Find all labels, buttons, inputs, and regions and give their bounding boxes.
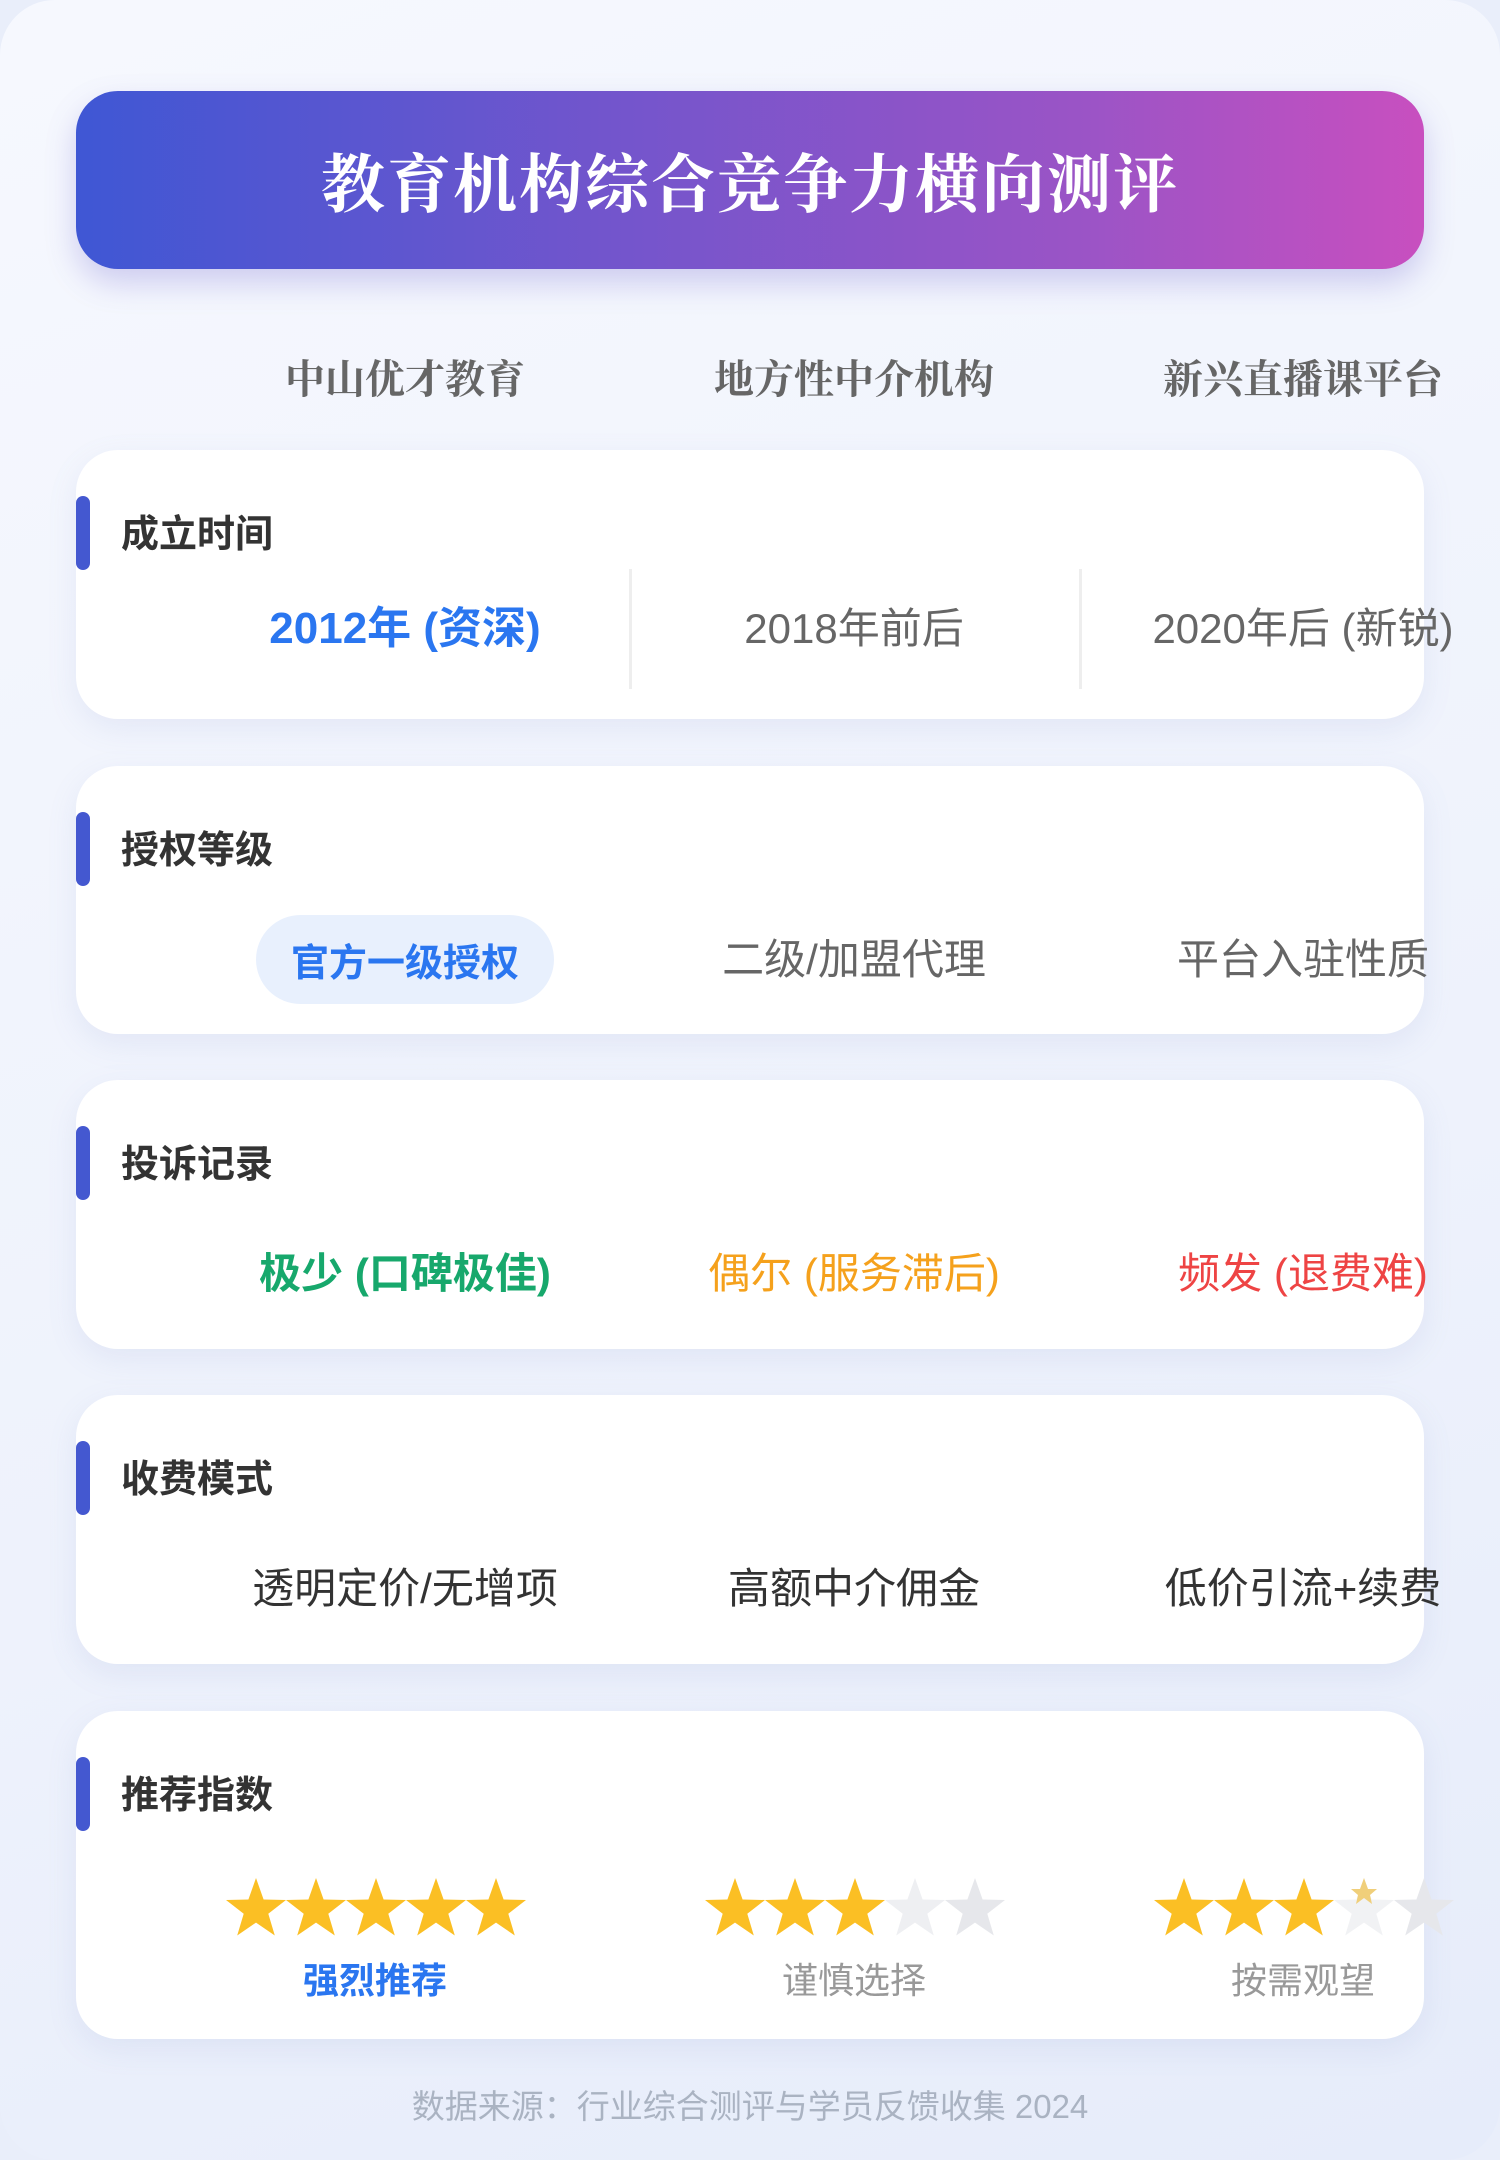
column header: 新兴直播课平台: 新兴直播课平台	[1163, 357, 1443, 402]
column header: 地方性中介机构: 地方性中介机构	[714, 357, 994, 402]
value: col2: 偶尔 (服务滞后)	[708, 1250, 1000, 1297]
rating label: col3: 按需观望	[1231, 1960, 1375, 2001]
value: col1: 极少 (口碑极佳)	[259, 1250, 551, 1297]
label: 成立时间	[121, 514, 273, 556]
stars: col3	[1154, 1878, 1454, 1936]
value: col3: 频发 (退费难)	[1178, 1250, 1428, 1297]
column header: 中山优才教育: 中山优才教育	[285, 357, 525, 402]
title	[76, 91, 1424, 269]
chip: 官方一级授权: 官方一级授权	[291, 943, 519, 985]
label: 推荐指数	[121, 1775, 273, 1817]
value: col2: 二级/加盟代理	[722, 936, 986, 983]
rating label: col1: 强烈推荐	[303, 1960, 447, 2001]
footer: source: 数据来源：行业综合测评与学员反馈收集 2024	[412, 2088, 1088, 2125]
panel: 投诉记录	[76, 1080, 1424, 1349]
panel: 授权等级	[76, 766, 1424, 1034]
chip: 官方一级授权	[256, 915, 554, 1004]
title: 教育机构综合竞争力横向测评	[321, 150, 1179, 221]
value: col3: 2020年后 (新锐)	[1152, 605, 1454, 652]
stars: col2	[705, 1878, 1005, 1936]
rating label: col2: 谨慎选择	[782, 1960, 926, 2001]
label: 投诉记录	[121, 1144, 273, 1186]
value: col3: 平台入驻性质	[1177, 936, 1429, 983]
value: col2: 高额中介佣金	[728, 1565, 980, 1612]
panel: 推荐指数	[76, 1711, 1424, 2039]
value: col1: 透明定价/无增项	[252, 1565, 558, 1612]
value: col3: 低价引流+续费	[1165, 1565, 1441, 1612]
value: col1: 2012年 (资深)	[269, 604, 541, 653]
panel: 收费模式	[76, 1395, 1424, 1664]
value: col2: 2018年前后	[744, 605, 964, 652]
label: 授权等级	[121, 830, 273, 872]
panel: 成立时间	[76, 450, 1424, 719]
label: 收费模式	[121, 1459, 273, 1501]
stars: col1	[226, 1878, 526, 1936]
